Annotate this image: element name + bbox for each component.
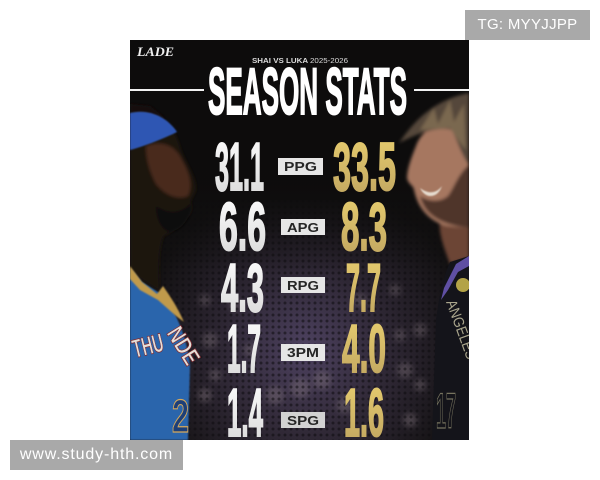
stat row: RPG: 4.3 — [221, 250, 264, 326]
stat row: SPG: 1.4 — [227, 375, 263, 451]
watermark: website — [10, 440, 183, 470]
jersey lettering: THU — [129, 327, 167, 364]
stat row: APG: 6.6 — [219, 189, 266, 265]
smile — [420, 186, 442, 196]
stat row: RPG: RPG — [287, 279, 319, 293]
neck — [440, 220, 469, 264]
stat row: 3PM — [227, 311, 386, 387]
title rule: left — [130, 89, 204, 91]
stat row: SPG: SPG — [287, 414, 319, 428]
subtitle: SHAI VS LUKA 2025-2026 — [252, 58, 348, 65]
player: Shai, left: NDE — [161, 322, 205, 370]
stat row: 3PM: 3PM — [287, 346, 319, 360]
head and neck — [130, 111, 196, 292]
poster: season stats graphic — [130, 40, 469, 440]
background: arena crowd — [130, 40, 469, 440]
watermark: website: www.study-hth.com — [20, 446, 173, 463]
jersey badge — [456, 278, 470, 292]
player: Luka, right: 17 — [436, 383, 456, 439]
jersey number: 2 — [172, 390, 189, 442]
poster: season stats graphic: 4.0 — [342, 311, 386, 387]
jersey: black city edition — [432, 256, 469, 440]
poster: season stats graphic: 1.6 — [344, 375, 384, 451]
hair — [399, 93, 469, 165]
face — [407, 120, 469, 228]
logo: LADE — [136, 44, 174, 59]
stat row: PPG: 31.1 — [215, 129, 264, 205]
stat row: APG: APG — [287, 221, 319, 235]
hair above headband — [131, 106, 161, 116]
beard — [420, 165, 469, 228]
poster: season stats graphic: 7.7 — [346, 250, 381, 326]
player: Shai, left — [129, 104, 205, 442]
watermark: Telegram handle: TG: MYYJJPP — [478, 16, 577, 33]
beard — [156, 204, 190, 232]
face highlight — [146, 144, 190, 198]
watermark: Telegram handle — [465, 10, 590, 40]
jersey: Thunder — [130, 268, 190, 440]
stat row: APG — [219, 189, 387, 265]
stat row: PPG: PPG — [284, 160, 317, 174]
stat row: SPG — [227, 375, 384, 451]
player: Luka, right — [399, 92, 469, 436]
headband — [130, 112, 177, 150]
jersey lettering: ANGELES — [442, 298, 479, 362]
title rule: right — [414, 89, 469, 91]
poster: season stats graphic: 8.3 — [341, 189, 387, 265]
stat row: RPG — [221, 250, 381, 326]
stat row: 3PM: 1.7 — [227, 311, 261, 387]
poster: season stats graphic: 33.5 — [333, 129, 396, 205]
